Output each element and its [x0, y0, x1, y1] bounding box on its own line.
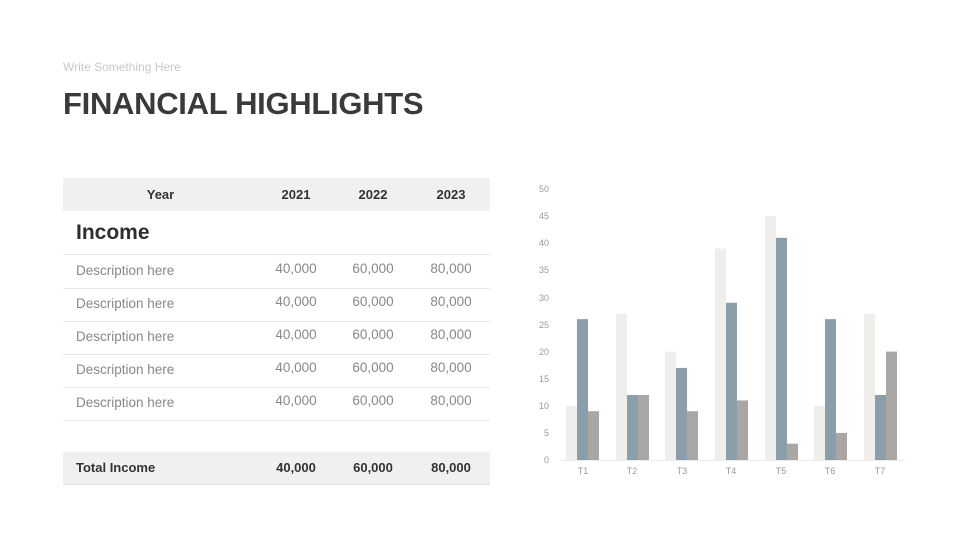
row 4: 40,000 — [275, 360, 317, 375]
row 1: 60,000 — [352, 261, 394, 276]
row 2: Description here — [76, 296, 174, 311]
bar chart: 50 — [539, 184, 549, 194]
bar chart: T6 — [825, 466, 835, 476]
row 3: 40,000 — [275, 327, 317, 342]
table header — [63, 178, 490, 211]
row 1: 40,000 — [275, 261, 317, 276]
table header: 2022 — [359, 187, 387, 202]
row 1: 80,000 — [430, 261, 472, 276]
row 2: 60,000 — [352, 294, 394, 309]
row 5: Description here — [76, 395, 174, 410]
row 3: 60,000 — [352, 327, 394, 342]
row 2: 40,000 — [275, 294, 317, 309]
bar chart: 0 — [544, 455, 549, 465]
bar chart: T4 — [726, 466, 736, 476]
row 4: 80,000 — [430, 360, 472, 375]
bar chart: 35 — [539, 265, 549, 275]
total row: Total Income — [76, 460, 155, 475]
bar chart: 30 — [539, 293, 549, 303]
row 5 — [63, 387, 490, 421]
bar chart: T5 — [776, 466, 786, 476]
total row: 80,000 — [431, 460, 471, 475]
row 1 — [63, 254, 490, 289]
bar chart: T7 — [875, 466, 885, 476]
income heading: Income — [76, 221, 150, 244]
bar chart: 25 — [539, 320, 549, 330]
row 4: Description here — [76, 362, 174, 377]
bar chart: 15 — [539, 374, 549, 384]
title: FINANCIAL HIGHLIGHTS — [63, 86, 423, 121]
table — [63, 178, 490, 485]
row 3: 80,000 — [430, 327, 472, 342]
bar chart: 20 — [539, 347, 549, 357]
row 5: 40,000 — [275, 393, 317, 408]
total row: 60,000 — [353, 460, 393, 475]
row 5: 80,000 — [430, 393, 472, 408]
row 4 — [63, 354, 490, 388]
table header: Year — [147, 187, 174, 202]
row 1: Description here — [76, 263, 174, 278]
table header: 2023 — [437, 187, 465, 202]
row 3 — [63, 321, 490, 355]
row 2: 80,000 — [430, 294, 472, 309]
subtitle: Write Something Here — [63, 60, 181, 74]
total row: 40,000 — [276, 460, 316, 475]
total row — [63, 452, 490, 485]
bar chart: T3 — [677, 466, 687, 476]
row 2 — [63, 288, 490, 322]
bar chart: T2 — [627, 466, 637, 476]
bar chart: T1 — [578, 466, 588, 476]
bar chart: 10 — [539, 401, 549, 411]
row 5: 60,000 — [352, 393, 394, 408]
table header: 2021 — [282, 187, 310, 202]
bar chart: 45 — [539, 211, 549, 221]
bar chart: 5 — [544, 428, 549, 438]
row 3: Description here — [76, 329, 174, 344]
bar chart: 40 — [539, 238, 549, 248]
row 4: 60,000 — [352, 360, 394, 375]
